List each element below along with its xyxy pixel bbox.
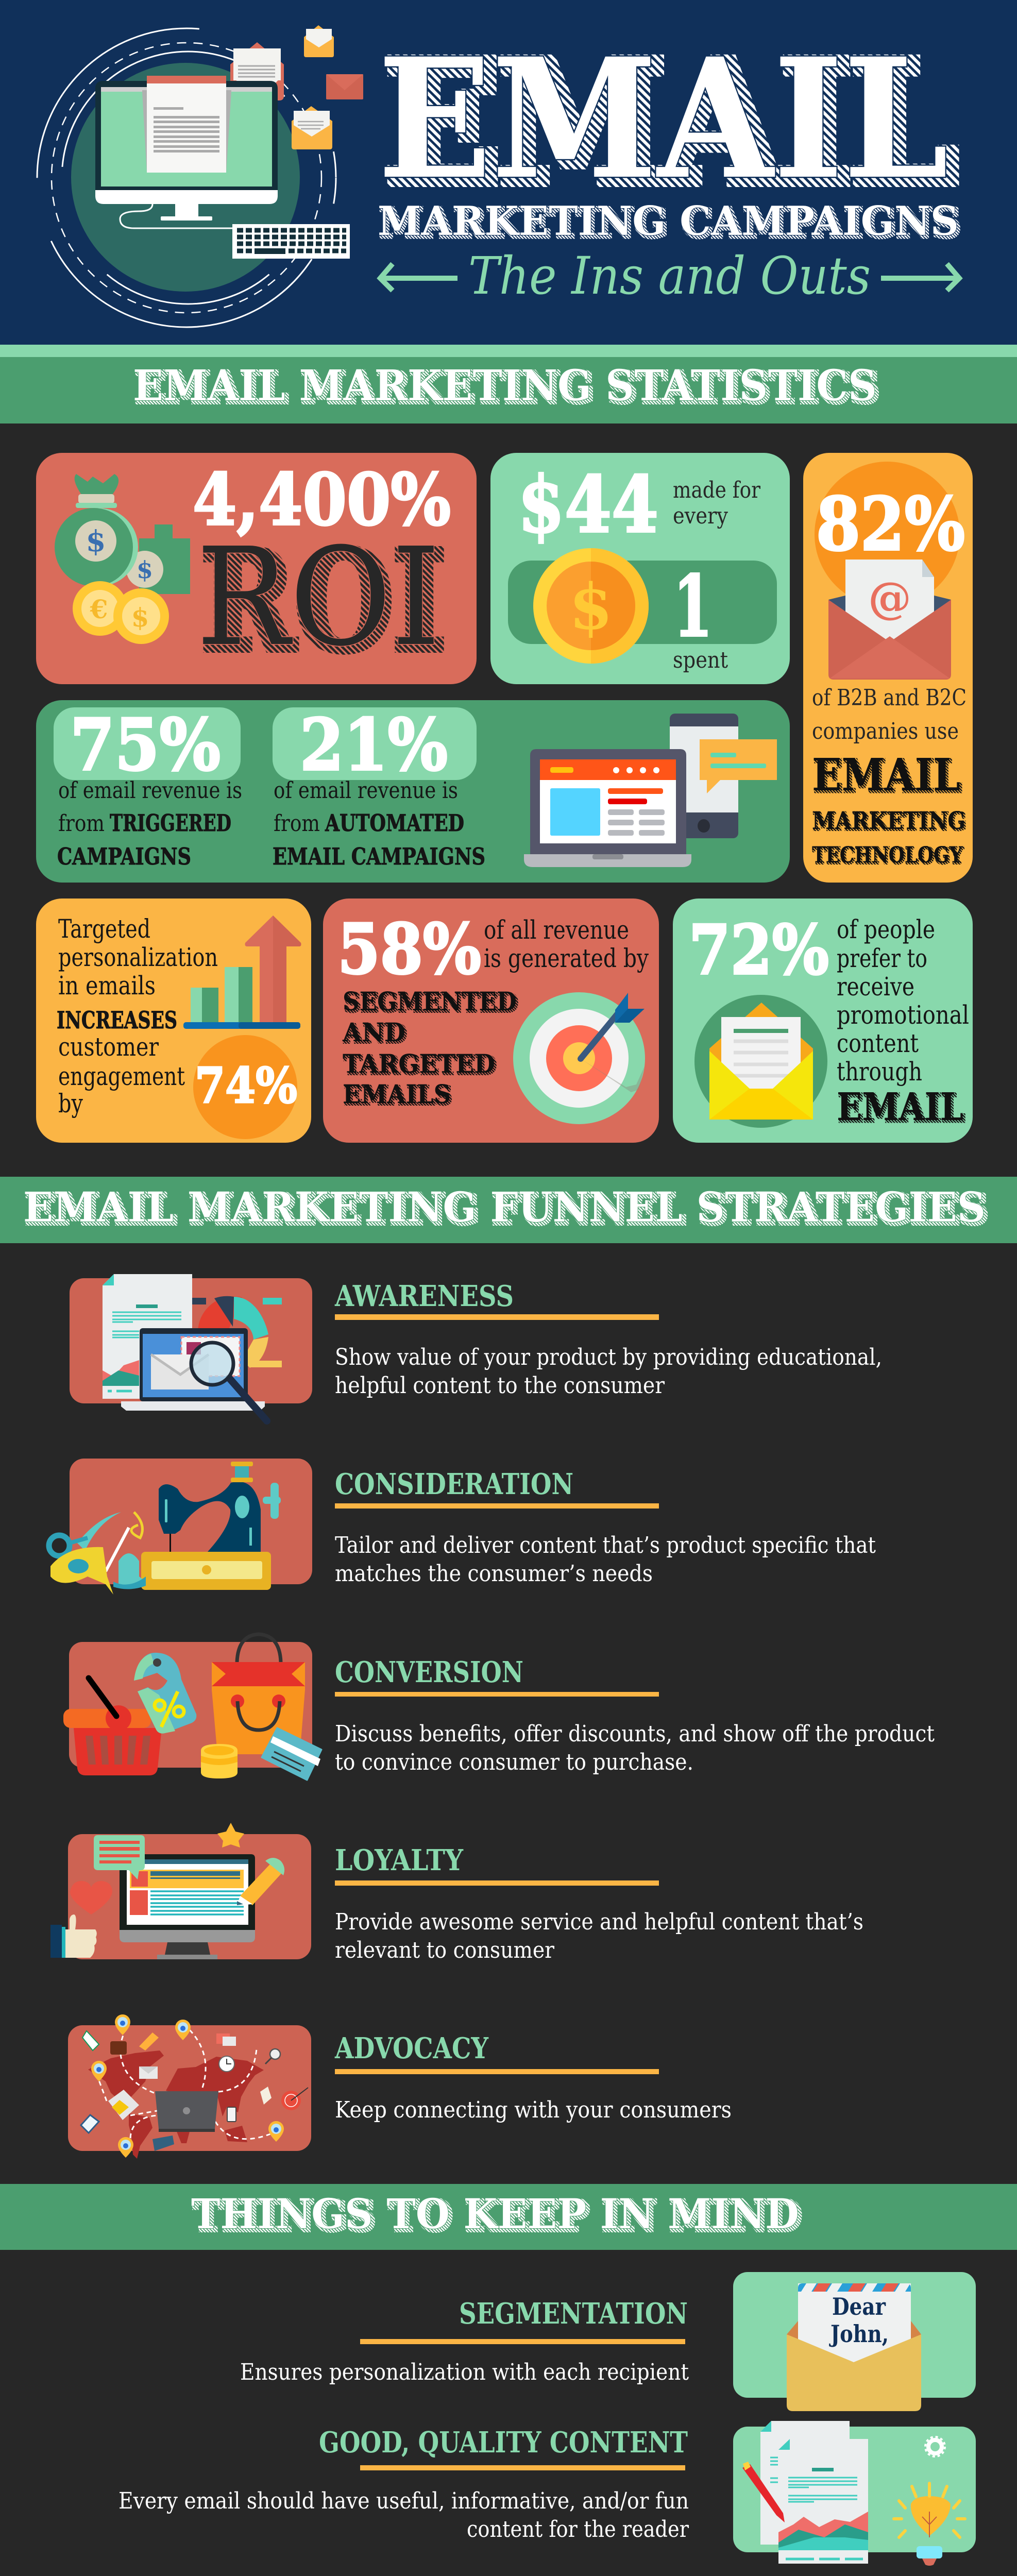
text: of email revenue is from automated email campaigns: from [274,810,320,837]
text: of people prefer to receive promotional content through: promotional [837,1000,969,1030]
text: targeted personalization in emails increases customer engagement by: personalization [58,942,218,972]
title: EMAIL: EMAIL [386,27,957,220]
text: of email revenue is from triggered campaigns: from [58,810,105,837]
header banner [0,0,1017,345]
text: of email revenue is from triggered campaigns [57,777,242,870]
text: loyalty description [335,1909,863,1963]
text: of people prefer to receive promotional content through: content [837,1028,919,1058]
icon: envelope with at sign [828,560,951,680]
heading: loyalty: LOYALTY [335,1843,464,1877]
text: spent: spent [673,647,728,673]
heading: segmentation: SEGMENTATION [459,2297,688,2331]
section heading: funnel strategies: EMAIL MARKETING FUNNEL STRATEGIES [26,1185,988,1233]
icon: money bag and coins: $ [131,602,149,633]
icon: money bag and coins: € [90,594,108,624]
section heading: email marketing statistics [0,345,1017,423]
icon: envelope with at sign: @ [868,572,911,623]
heading: consideration: CONSIDERATION [335,1467,573,1501]
text: segmented and targeted emails: SEGMENTED [343,986,517,1016]
text: segmented and targeted emails: SEGMENTED [344,988,518,1018]
text: awareness description [335,1344,882,1399]
icon: world network [81,2014,308,2159]
stat: 74%: 74% [195,1057,297,1114]
step: advocacy [68,2014,732,2159]
text: loyalty description: relevant to consumer [335,1937,555,1963]
subtitle: marketing campaigns: MARKETING CAMPAIGNS [378,198,959,245]
step: consideration [49,1459,876,1595]
text: segmented and targeted emails: TARGETED [343,1048,495,1079]
text: loyalty description: Provide awesome service and helpful content that’s [335,1909,863,1935]
text: conversion description: to convince consumer to purchase. [335,1749,693,1775]
stat: 58%: 58% [337,908,481,990]
text: of B2B and B2C companies use [812,685,967,744]
text: targeted personalization in emails increases customer engagement by: engagement [58,1061,185,1091]
text: of email revenue is from triggered campaigns: CAMPAIGNS [57,843,191,870]
text: of people prefer to receive promotional content through [837,914,969,1087]
text: of people prefer to receive promotional content through: prefer to [837,943,927,973]
text: EMAIL MARKETING TECHNOLOGY: TECHNOLOGY [813,843,964,869]
text: targeted personalization in emails increases customer engagement by [57,914,218,1118]
text: Dear John, [829,2293,889,2348]
heading: good quality content: GOOD, QUALITY CONTENT [319,2426,688,2460]
icon: money bag and coins [55,474,190,644]
text: conversion description [335,1721,935,1775]
stat: 4,400%: 4,400% [193,457,451,541]
text: made for every: every [673,503,728,529]
heading: awareness: AWARENESS [334,1279,514,1313]
text: segmented and targeted emails: EMAILS [343,1079,451,1109]
text: advocacy description: Keep connecting with your consumers [335,2097,732,2123]
icon: monitor, chat, heart, thumb and pencil [50,1823,284,1959]
step: conversion [63,1634,935,1780]
text: EMAIL MARKETING TECHNOLOGY [812,749,967,869]
text: segmented and targeted emails: EMAILS [344,1080,452,1111]
panel: targeted personalization 74% [36,899,311,1143]
text: consideration description: matches the consumer’s needs [335,1561,653,1587]
item: good, quality content [118,2421,976,2566]
text: Dear John,: Dear [832,2293,886,2320]
section heading: email marketing statistics: EMAIL MARKETING STATISTICS [135,363,879,413]
stat: 74% [193,1035,297,1139]
step: loyalty [50,1823,863,1963]
text: targeted personalization in emails increases customer engagement by: Targeted [58,914,150,944]
stat: 72%: 72% [689,910,829,990]
text: awareness description: helpful content to the consumer [335,1372,665,1399]
text: of people prefer to receive promotional content through: of people [837,914,935,944]
stat: 21%: 21% [300,703,448,787]
icon: sewing machine [49,1462,281,1595]
text: EMAIL MARKETING TECHNOLOGY: EMAIL [813,751,962,803]
panel: 72% prefer email [673,899,973,1143]
text: of people prefer to receive promotional content through: receive [837,972,914,1002]
section heading: things to keep in mind: THINGS TO KEEP IN MIND [194,2192,802,2240]
text: awareness description: Show value of your product by providing educational, [335,1344,882,1370]
icon: money bag and coins: $ [137,556,153,584]
text: Dear John,: John, [829,2320,889,2348]
panel: 82% of companies use email marketing technology [803,453,973,883]
icon: open envelope [694,995,827,1128]
stat: 75%: 75% [70,703,221,787]
stat: ROI: ROI [201,522,446,681]
text: EMAIL: EMAIL [838,1087,965,1131]
arrow: left [380,264,457,291]
text: of email revenue is from automated email campaigns: EMAIL CAMPAIGNS [273,843,485,870]
text: made for every [673,477,761,529]
panel: $44 made for every $1 spent [490,453,790,684]
text: targeted personalization in emails increases customer engagement by: in emails [58,971,156,1001]
icon: laptop and phone [524,714,777,867]
icon: documents, laptop and magnifier [103,1274,282,1421]
icon: Dear John envelope [733,2272,976,2411]
text: EMAIL MARKETING TECHNOLOGY: MARKETING [812,807,965,835]
tagline: the ins and outs: The Ins and Outs [468,246,871,306]
text: targeted personalization in emails increases customer engagement by: INCREASES [57,1006,177,1034]
text: of email revenue is from triggered campaigns: of email revenue is [58,777,242,804]
text: consideration description: Tailor and deliver content that’s product specific that [335,1532,876,1558]
text: made for every: made for [673,477,761,503]
text: segmented and targeted emails: TARGETED [344,1050,497,1080]
icon: computer with emails [37,25,363,327]
text: EMAIL MARKETING TECHNOLOGY: EMAIL [812,749,960,801]
panel: triggered and automated campaigns [36,700,790,883]
text: segmentation description: Ensures personalization with each recipient [240,2359,689,2385]
subtitle: marketing campaigns: MARKETING CAMPAIGNS [380,200,961,247]
text: segmented and targeted emails: AND [344,1019,407,1049]
text: targeted personalization in emails increases customer engagement by: customer [58,1032,159,1062]
text: of email revenue is from triggered campaigns: TRIGGERED [110,809,231,837]
text: of email revenue is from automated email campaigns: of email revenue is [274,777,458,804]
text: EMAIL: EMAIL [837,1085,963,1129]
text: EMAIL MARKETING TECHNOLOGY: TECHNOLOGY [812,842,963,868]
text: of all revenue is generated by: of all revenue [484,915,629,945]
stat: 82%: 82% [816,482,965,567]
text: of all revenue is generated by [484,915,649,973]
text: of B2B and B2C companies use: of B2B and B2C [812,685,967,711]
text: of people prefer to receive promotional content through: through [837,1057,922,1087]
arrow: right [881,264,959,291]
icon: documents, pencil and light bulb [733,2421,976,2566]
section heading: email marketing statistics: EMAIL MARKETING STATISTICS [133,361,877,411]
panel: 58% segmented and targeted emails [323,899,659,1143]
icon: dollar coin [533,548,649,664]
heading: conversion: CONVERSION [335,1655,523,1689]
text: good quality content description: content for the reader [467,2516,689,2543]
heading: advocacy: ADVOCACY [334,2031,489,2065]
stat: 1: 1 [673,557,713,656]
section heading: things to keep in mind: THINGS TO KEEP IN MIND [191,2190,799,2238]
title: EMAIL: EMAIL [378,23,948,216]
text: segmented and targeted emails [342,986,518,1111]
text: EMAIL MARKETING TECHNOLOGY: MARKETING [813,808,967,836]
icon: dollar coin: $ [569,569,613,643]
icon: growth arrow chart [183,916,301,1029]
text: conversion description: Discuss benefits, offer discounts, and show off the product [335,1721,935,1747]
icon: target with arrow [513,992,645,1124]
step: awareness [70,1274,882,1421]
panel: 4,400% ROI [36,453,477,684]
text: of email revenue is from automated email campaigns: AUTOMATED [325,809,464,837]
stat: $44: $44 [518,460,658,550]
text: segmented and targeted emails: AND [342,1017,405,1047]
icon: basket, tag, bag, coins and card [63,1634,321,1780]
section heading: things to keep in mind [0,2184,1017,2250]
text: good quality content description: Every email should have useful, informative, and/or fun [118,2488,689,2514]
section heading: funnel strategies: EMAIL MARKETING FUNNEL STRATEGIES [23,1183,986,1231]
text: of all revenue is generated by: is generated by [484,943,649,973]
text: of email revenue is from automated email campaigns [273,777,485,870]
text: good quality content description [118,2488,689,2543]
stat: ROI: ROI [196,519,440,676]
item: segmentation [240,2272,976,2411]
icon: money bag and coins: $ [86,524,106,558]
text: targeted personalization in emails increases customer engagement by: by [58,1089,83,1118]
text: of B2B and B2C companies use: companies use [812,718,959,744]
text: consideration description [335,1532,876,1587]
